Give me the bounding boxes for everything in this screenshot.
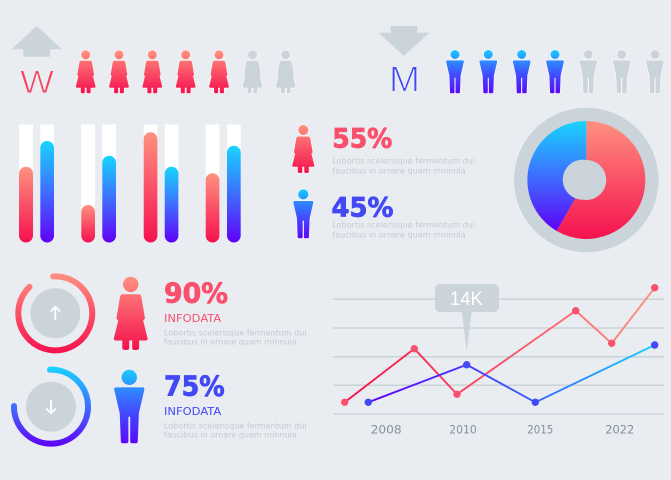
text block: Lobortis scelerisque fermentum dui	[332, 221, 475, 230]
icon: woman	[292, 125, 314, 173]
axis labels: 2022	[605, 422, 634, 436]
icons: women row	[76, 50, 296, 93]
donut chart	[514, 108, 659, 252]
panel: men pictogram row	[379, 26, 664, 100]
text block	[164, 328, 307, 347]
icon: up arrow	[12, 26, 62, 57]
series: women line	[341, 284, 658, 406]
text block: Lobortis scelerisque fermentum dui	[164, 328, 307, 337]
text block: faucibus in ornare quam minnula	[332, 166, 466, 175]
series: men line	[365, 341, 658, 406]
panel: 45% men stat	[293, 189, 475, 239]
icon: man	[293, 189, 313, 238]
text block	[164, 421, 307, 440]
icon: woman	[114, 277, 148, 350]
text block	[332, 156, 475, 175]
text block: faucibus in ornare quam minnula	[164, 338, 297, 347]
callout: 14K: 14K	[450, 289, 483, 310]
gauge: 75% ring	[14, 370, 88, 444]
axis labels: 2008	[371, 422, 402, 436]
gauge: 90% ring	[18, 276, 92, 350]
panel: women pictogram row	[12, 26, 296, 100]
label: infodata: INFODATA	[164, 312, 222, 325]
text block: faucibus in ornare quam minnula	[332, 230, 466, 239]
text block: Lobortis scelerisque fermentum dui	[164, 421, 307, 430]
label: M: M	[389, 59, 420, 100]
figure: 45%: 45%	[332, 193, 394, 224]
label: W: W	[20, 64, 55, 100]
icon: man	[114, 370, 144, 443]
text block	[332, 221, 475, 239]
line chart	[333, 284, 664, 436]
figure: 55%: 55%	[332, 124, 392, 155]
icons: men row	[446, 50, 664, 93]
figure: 90%: 90%	[164, 278, 228, 310]
panel: 90% infodata	[18, 276, 307, 350]
panel: 75% infodata	[14, 370, 307, 444]
panel: 55% women stat	[292, 124, 475, 175]
axis labels	[371, 422, 634, 436]
text block: faucibus in ornare quam minnula	[164, 431, 297, 440]
icon: down arrow	[379, 26, 429, 56]
figure: 75%: 75%	[164, 371, 225, 403]
text block: Lobortis scelerisque fermentum dui	[332, 156, 475, 165]
bar chart	[19, 124, 241, 243]
label: infodata: INFODATA	[164, 405, 222, 418]
callout: 14K	[435, 284, 499, 352]
axis labels: 2010	[449, 422, 477, 436]
axis labels: 2015	[527, 422, 553, 436]
